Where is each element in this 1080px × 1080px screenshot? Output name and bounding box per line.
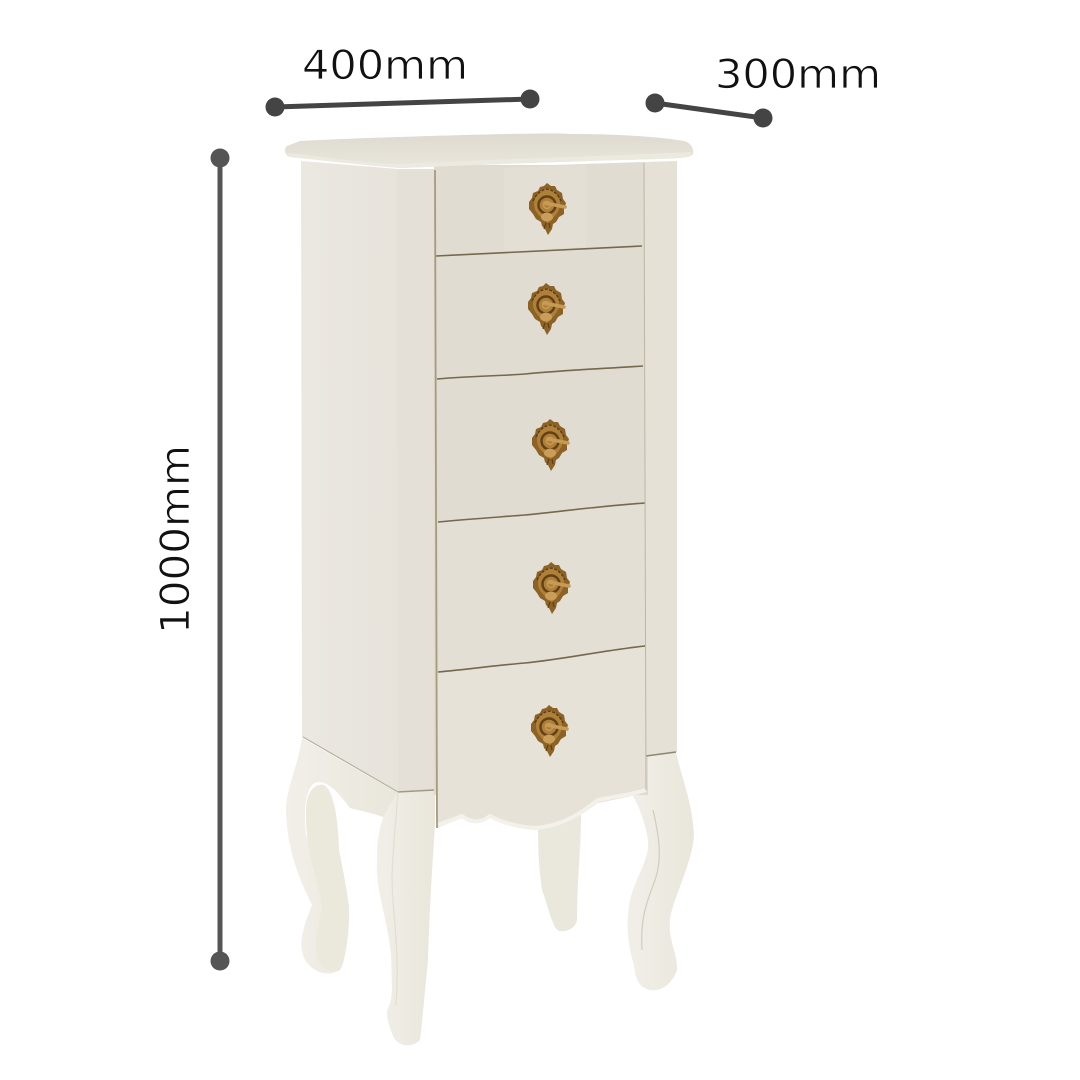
handle 2 (528, 283, 565, 335)
handle 1 (529, 183, 566, 235)
front corner stile (397, 169, 435, 792)
front left leg (377, 790, 435, 1045)
depth dimension arrow (646, 94, 772, 128)
depth label: 300mm (715, 50, 881, 98)
drawer gaps (435, 163, 646, 828)
drawer 4 (438, 504, 645, 672)
left rear leg inner face (306, 785, 349, 971)
drawer 2 (436, 247, 642, 379)
drawer front panels (504, 165, 586, 251)
side panel (301, 161, 398, 792)
top edge (287, 152, 692, 168)
right stile (644, 161, 677, 756)
skirt highlight (438, 790, 646, 828)
chest of drawers (285, 133, 694, 1045)
stile seam (398, 790, 434, 792)
table top (285, 133, 693, 168)
width dimension arrow (266, 90, 540, 116)
handle 5 (531, 705, 568, 757)
drawer 1 (435, 162, 644, 256)
height label: 1000mm (151, 445, 199, 634)
right leg (627, 752, 694, 990)
width label: 400mm (302, 41, 468, 89)
handle 3 (532, 419, 569, 471)
right stile seam (646, 752, 676, 756)
side seam (303, 737, 398, 792)
front left leg edge (392, 793, 398, 1005)
drawer 3 (437, 366, 645, 522)
drawer 5 with carved skirt (437, 647, 646, 830)
left rear leg and side apron (286, 738, 398, 973)
handle 4 (533, 562, 570, 614)
height dimension arrow (210, 148, 230, 970)
right leg inner line (642, 810, 659, 950)
drawer backing (434, 165, 648, 795)
rear leg (538, 815, 581, 931)
